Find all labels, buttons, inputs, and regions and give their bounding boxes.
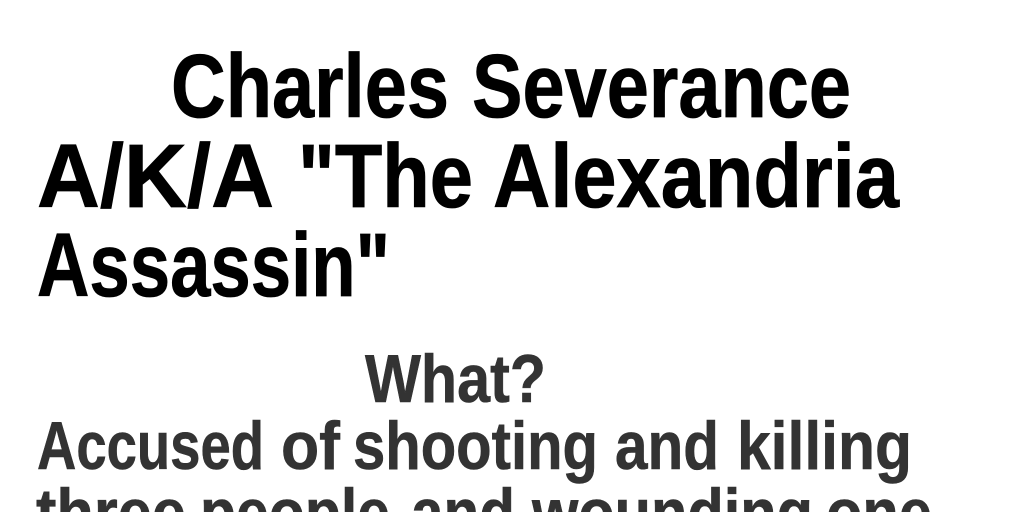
heading: what: What? [365, 341, 546, 417]
text block: description [36, 408, 932, 512]
title: Charles [171, 37, 449, 137]
text block: description: and [615, 408, 719, 484]
title: A/K/A [37, 127, 274, 227]
title [37, 37, 900, 316]
text block: description: Accused [37, 408, 264, 484]
text block: description: shooting [353, 408, 598, 484]
text block: description: of [281, 408, 340, 484]
title: "The [298, 127, 473, 227]
title: Severance [472, 37, 851, 137]
title: Alexandria [493, 127, 900, 227]
title: Assassin" [37, 216, 390, 316]
text block: description: killing [737, 408, 912, 484]
